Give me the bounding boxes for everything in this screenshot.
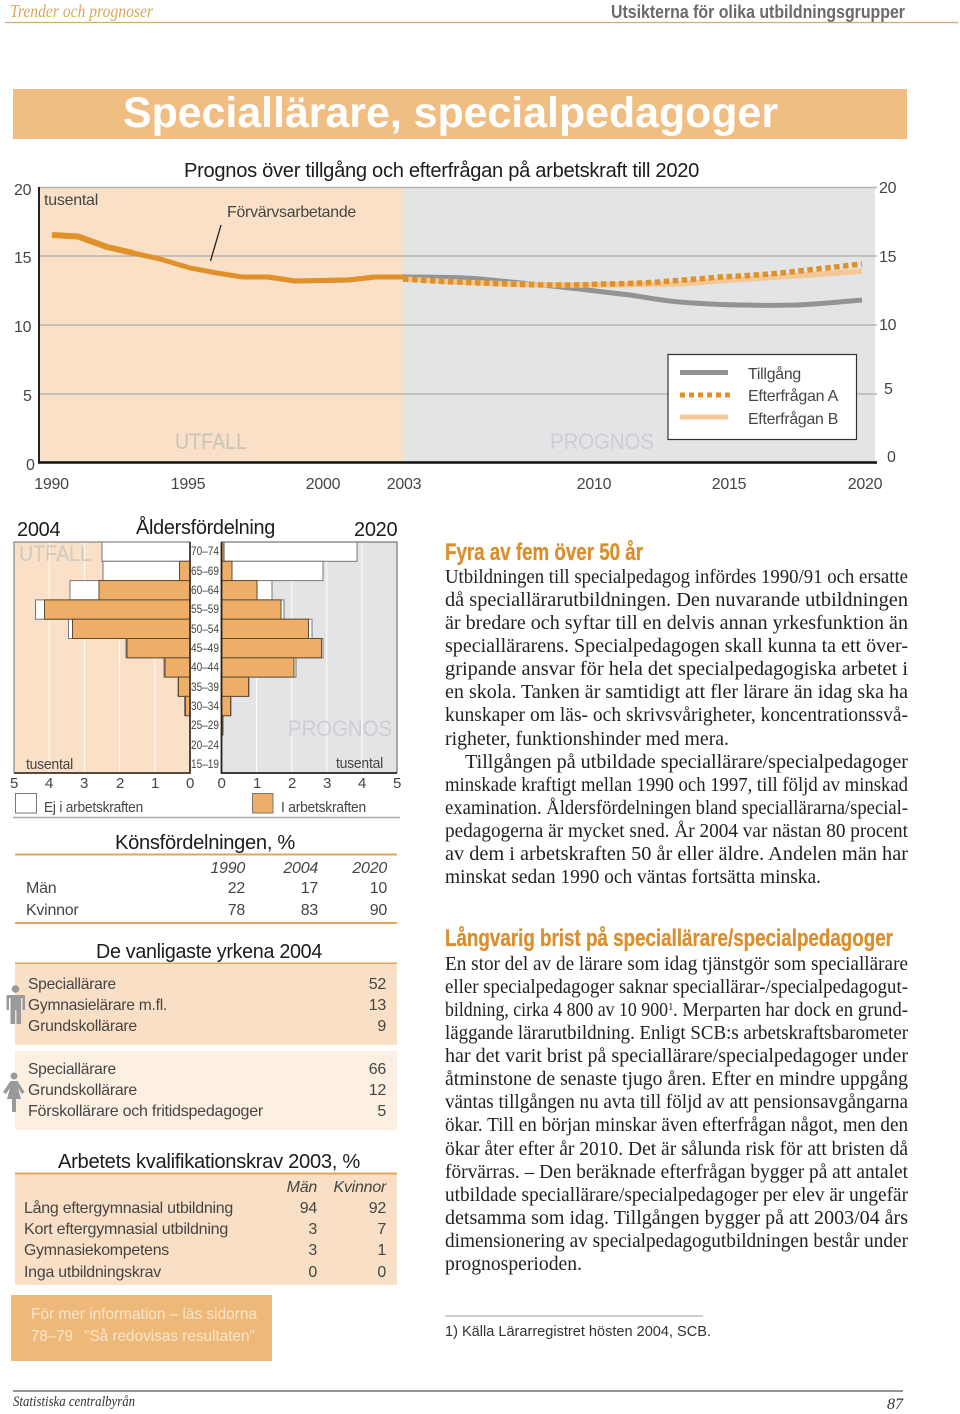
table: job qualification requirements: 92 (369, 1200, 386, 1217)
label: UTFALL: UTFALL (175, 429, 247, 454)
heading: forecast chart: Prognos över tillgång och efterfrågan på arbetskraft till 2020 (184, 160, 699, 182)
age group labels: 45–49 (191, 641, 219, 655)
article text 1: kunskaper om läs- och skrivsvårigheter, koncentrationssvå- (445, 705, 908, 726)
pyramid axis labels: 1 (253, 775, 261, 792)
article text 2: bildning, cirka 4 800 av 10 900 (445, 1000, 668, 1021)
table: job qualification requirements: Inga utbildningskrav (24, 1264, 161, 1281)
age group labels: 20–24 (191, 738, 219, 752)
article text 2: har det varit brist på speciallärare/specialpedagoger under (445, 1046, 909, 1067)
pyramid axis labels: 2 (288, 775, 296, 792)
article text 2 (445, 954, 909, 1275)
page footer: 87 (887, 1396, 904, 1413)
article text 2: läggande lärarutbildning. Enligt SCB:s arbetskraftsbarometer (445, 1023, 908, 1044)
article section 1 (445, 539, 909, 888)
icon: woman (3, 1072, 24, 1112)
age group labels: 65–69 (191, 564, 219, 578)
pyramid axis labels: 4 (358, 775, 366, 792)
page header: Trender och prognoser (10, 1, 154, 21)
article text 2: dimensionering av specialpedagogutbildningen består under (445, 1231, 908, 1252)
pyramid heading: 2004 (17, 519, 60, 541)
article text 1: är bredare och syftar till en delvis annan yrkesfunktion än (445, 613, 908, 634)
age group labels (191, 544, 219, 771)
y axis labels right: 5 (884, 381, 893, 398)
age group labels: 55–59 (191, 602, 219, 616)
line: employed actual (52, 235, 403, 281)
article text 1: Utbildningen till specialpedagog infördes 1990/91 och ersatte (445, 567, 908, 588)
table: gender distribution: 2020 (351, 860, 387, 877)
legend: Efterfrågan B (748, 410, 838, 428)
table: job qualification requirements: Gymnasiekompetens (24, 1242, 169, 1259)
article text 1: av dem i arbetskraften 50 år eller äldre. Andelen män har (445, 844, 909, 865)
table: job qualification requirements: Kort eftergymnasial utbildning (24, 1221, 228, 1238)
panel: men: Gymnasielärare m.fl. (28, 997, 167, 1014)
table: gender distribution: Män (26, 880, 56, 897)
panel: women: 66 (369, 1061, 386, 1078)
table: gender distribution: 78 (228, 902, 245, 919)
x axis year labels (34, 476, 883, 493)
table: gender distribution: 10 (370, 880, 387, 897)
y axis labels left: 10 (14, 319, 32, 336)
unit labels: tusental (26, 756, 73, 773)
article text 1: examination. Åldersfördelningen bland speciallärarna/special- (445, 798, 908, 819)
y axis labels left (14, 182, 35, 474)
article text 1: minskat sedan 1990 och väntas fortsätta minska. (445, 867, 821, 888)
article text 2: ökar åter efter år 2010. Det är sålunda risk för att bristen då (445, 1139, 908, 1160)
age group labels: 35–39 (191, 680, 219, 694)
table: gender distribution: 83 (301, 902, 318, 919)
line: demand A (403, 264, 862, 285)
age group labels: 40–44 (191, 660, 219, 674)
article text 1: pedagogerna är mycket sned. År 2004 var nästan 80 procent (445, 821, 909, 842)
label: PROGNOS: PROGNOS (550, 429, 654, 454)
article text 1: righeter, funktionshinder med mera. (445, 729, 729, 750)
title banner: Speciallärare, specialpedagoger (123, 89, 778, 137)
legend: Efterfrågan A (748, 387, 839, 405)
x axis year labels: 1995 (171, 476, 206, 493)
panel: women: 12 (369, 1082, 386, 1099)
line: supply (268, 277, 862, 305)
pyramid axis labels: 0 (186, 775, 194, 792)
pyramid heading (17, 516, 397, 541)
unit labels: tusental (336, 755, 383, 772)
label: UTFALL: UTFALL (19, 541, 91, 566)
y axis labels right (879, 180, 897, 466)
table: gender distribution: 90 (370, 902, 387, 919)
table: gender distribution: Kvinnor (26, 902, 79, 919)
article text 2: prognosperioden. (445, 1254, 582, 1275)
article text 2: 1 (668, 1001, 674, 1013)
pyramid axis labels: 3 (80, 775, 88, 792)
pyramid axis labels: 2 (116, 775, 124, 792)
article text 2: förvärras. – Den beräknade efterfrågan bygger på att antalet (445, 1162, 909, 1183)
article text 1: då speciallärarutbildningen. Den nuvarande utbildningen (445, 590, 908, 611)
article section 2 (445, 925, 909, 1275)
x axis year labels: 2010 (577, 476, 612, 493)
page header (5, 1, 958, 22)
bars: 2004 in labour force (44, 561, 190, 716)
x axis year labels: 2000 (306, 476, 341, 493)
callout line (210, 225, 221, 261)
pyramid legend: I arbetskraften (281, 799, 366, 816)
footnote: 1) Källa Lärarregistret hösten 2004, SCB. (445, 1324, 711, 1340)
unit label: tusental (44, 192, 98, 209)
pyramid heading: 2020 (354, 519, 397, 541)
page footer (13, 1391, 904, 1413)
article text 2: utbildade speciallärare/specialpedagoger per elev är ungefär (445, 1185, 908, 1206)
pyramid axis labels: 5 (393, 775, 401, 792)
table: job qualification requirements (15, 1151, 397, 1285)
y axis labels right: 10 (879, 317, 897, 334)
callout: more information: 78–79 (31, 1328, 73, 1345)
y axis labels left: 5 (23, 388, 32, 405)
article text 1: minskade kraftigt mellan 1990 och 1997, till följd av minskad (445, 775, 908, 796)
panel: men: Speciallärare (28, 976, 116, 993)
table: job qualification requirements: 0 (377, 1264, 386, 1281)
callout: more information: För mer information – läs sidorna (31, 1306, 257, 1323)
unit labels (26, 755, 383, 773)
pyramid axis labels: 3 (323, 775, 331, 792)
panel: women: Förskollärare och fritidspedagoger (28, 1103, 264, 1120)
callout: more information: "Så redovisas resultaten" (84, 1327, 255, 1345)
label: PROGNOS: PROGNOS (288, 716, 392, 741)
article text 2: En stor del av de lärare som idag tjänstgör som speciallärare (445, 954, 908, 975)
pyramid axis labels: 5 (10, 775, 18, 792)
icon: man (6, 985, 25, 1024)
article text 2: åtminstone de senaste tjugo åren. Efter en mindre uppgång (445, 1069, 908, 1090)
page footer: Statistiska centralbyrån (13, 1394, 135, 1410)
population pyramid: age distribution (10, 516, 401, 818)
table: job qualification requirements: 1 (377, 1242, 386, 1259)
article text 2: väntas tillgången nu avta till följd av att pensionsavgångarna (445, 1092, 908, 1113)
y axis labels left: 20 (14, 182, 32, 199)
panel: women (15, 1051, 397, 1130)
legend (668, 354, 856, 440)
age group labels: 60–64 (191, 583, 219, 597)
panel: women: 5 (377, 1103, 386, 1120)
article text 1: Tillgången på utbildade speciallärare/specialpedagoger (465, 752, 909, 773)
callout: more information (11, 1295, 272, 1361)
page header: Utsikterna för olika utbildningsgrupper (611, 2, 905, 22)
table: gender distribution: 22 (228, 880, 245, 897)
age group labels: 30–34 (191, 699, 219, 713)
y axis labels right: 15 (879, 249, 897, 266)
table: job qualification requirements: 94 (300, 1200, 317, 1217)
pyramid legend: Ej i arbetskraften (44, 799, 143, 816)
bars: 2020 in labour force (222, 542, 322, 735)
legend: Tillgång (748, 365, 801, 383)
panel: men: 9 (377, 1018, 386, 1035)
bars: 2004 outside labour force (36, 542, 190, 716)
pyramid axis labels: 1 (151, 775, 159, 792)
pyramid axis labels: 4 (45, 775, 53, 792)
table: job qualification requirements: Män (287, 1179, 317, 1196)
panel: men: Grundskollärare (28, 1018, 137, 1035)
article text 1: en skola. Tanken är samtidigt att fler lärare än idag ska ha (445, 682, 908, 703)
pyramid axis labels (10, 775, 401, 792)
table: job qualification requirements: 7 (377, 1221, 386, 1238)
pyramid legend (16, 794, 366, 816)
age group labels: 15–19 (191, 757, 219, 771)
table: gender distribution: 2004 (282, 860, 318, 877)
age group labels: 25–29 (191, 718, 219, 732)
panel: women: Speciallärare (28, 1061, 116, 1078)
table: job qualification requirements: 3 (308, 1242, 317, 1259)
x axis year labels: 2015 (712, 476, 747, 493)
panel: men (15, 964, 397, 1045)
table: gender distribution: Könsfördelningen, % (115, 832, 296, 854)
y axis labels right: 20 (879, 180, 897, 197)
article text 1: gripande ansvar för hela det specialpedagogiska arbetet i (445, 659, 909, 680)
table: job qualification requirements: Lång eftergymnasial utbildning (24, 1199, 233, 1217)
panel: most common occupations (3, 941, 397, 1130)
x axis year labels: 2003 (387, 476, 422, 493)
age group labels: 50–54 (191, 622, 219, 636)
label: Förvärvsarbetande: Förvärvsarbetande (227, 204, 356, 221)
table: job qualification requirements: Arbetets kvalifikationskrav 2003, % (58, 1151, 361, 1173)
table: gender distribution (15, 832, 397, 923)
article heading 1: Fyra av fem över 50 år (445, 539, 643, 566)
article text 1: speciallärarens. Specialpedagogen skall kunna ta ett över- (445, 636, 908, 657)
panel: women: Grundskollärare (28, 1082, 137, 1099)
bars: 2020 outside labour force (222, 542, 357, 716)
y axis labels left: 15 (14, 250, 32, 267)
y axis labels left: 0 (26, 457, 35, 474)
panel: most common occupations: De vanligaste yrkena 2004 (96, 941, 322, 963)
age group labels: 70–74 (191, 544, 219, 558)
table: job qualification requirements: Kvinnor (334, 1179, 387, 1196)
x axis year labels: 1990 (34, 476, 69, 493)
x axis year labels: 2020 (848, 476, 883, 493)
table: job qualification requirements: 0 (308, 1264, 317, 1281)
line: demand B (403, 271, 862, 285)
article text 2: ökar. Till en början minskar även efterfrågan något, men den (445, 1115, 908, 1136)
table: gender distribution: 17 (301, 880, 318, 897)
article text 2: . Merparten har dock en grund- (673, 1000, 908, 1021)
table: gender distribution: 1990 (210, 860, 245, 877)
pyramid axis labels: 0 (217, 775, 226, 792)
panel: men: 13 (369, 997, 386, 1014)
line chart: supply and demand forecast (14, 180, 897, 493)
table: job qualification requirements: 3 (308, 1221, 317, 1238)
panel: men: 52 (369, 976, 386, 993)
article text 2: detsamma som idag. Tillgången bygger på att 2003/04 års (445, 1208, 908, 1229)
article text 2: eller specialpedagoger saknar speciallärar-/specialpedagogut- (445, 977, 908, 998)
pyramid heading: Åldersfördelning (136, 516, 275, 539)
article text 1 (445, 567, 909, 888)
y axis labels right: 0 (887, 449, 896, 466)
